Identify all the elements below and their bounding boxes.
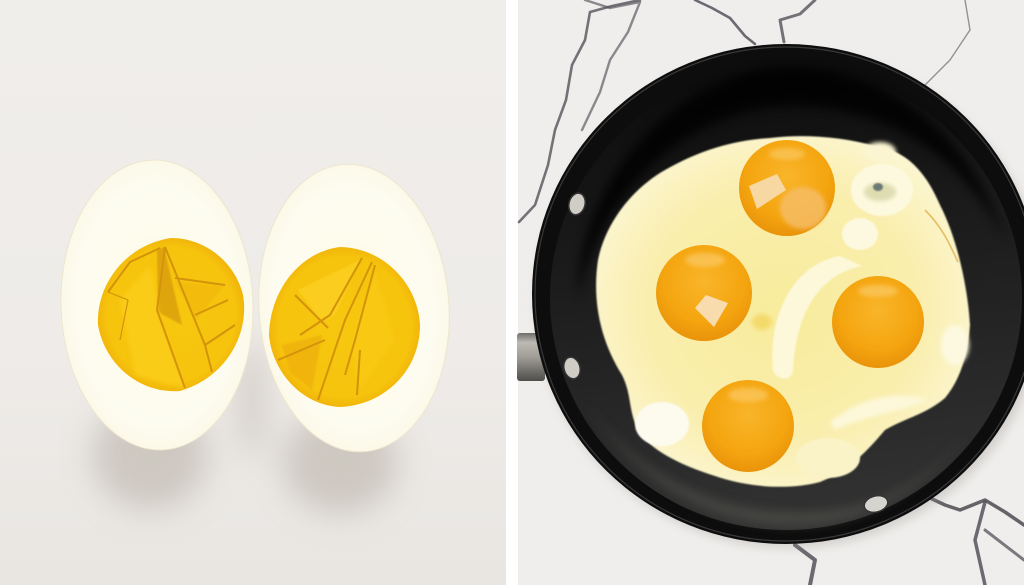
egg white left	[56, 157, 258, 453]
marble veins	[519, 0, 1024, 585]
boiled egg right half	[249, 158, 459, 458]
yolk right	[269, 247, 420, 407]
yolk bottom	[702, 380, 794, 472]
marble background left	[0, 0, 506, 585]
yolk left	[98, 238, 244, 391]
panel: boiled eggs	[0, 0, 506, 585]
egg white	[596, 136, 970, 487]
boiled egg left half	[56, 157, 258, 453]
marble background right	[518, 0, 1024, 585]
yolk top	[739, 140, 835, 236]
yolk right	[832, 276, 924, 368]
egg shadows	[92, 340, 398, 514]
pan rivets	[561, 191, 890, 515]
pan handle	[517, 333, 545, 381]
panel: fried eggs in pan	[517, 0, 1024, 585]
egg white right	[249, 158, 459, 458]
pan shadow	[536, 52, 1024, 548]
yolk left	[656, 245, 752, 341]
pan body	[532, 44, 1024, 544]
white highlights	[772, 256, 862, 379]
